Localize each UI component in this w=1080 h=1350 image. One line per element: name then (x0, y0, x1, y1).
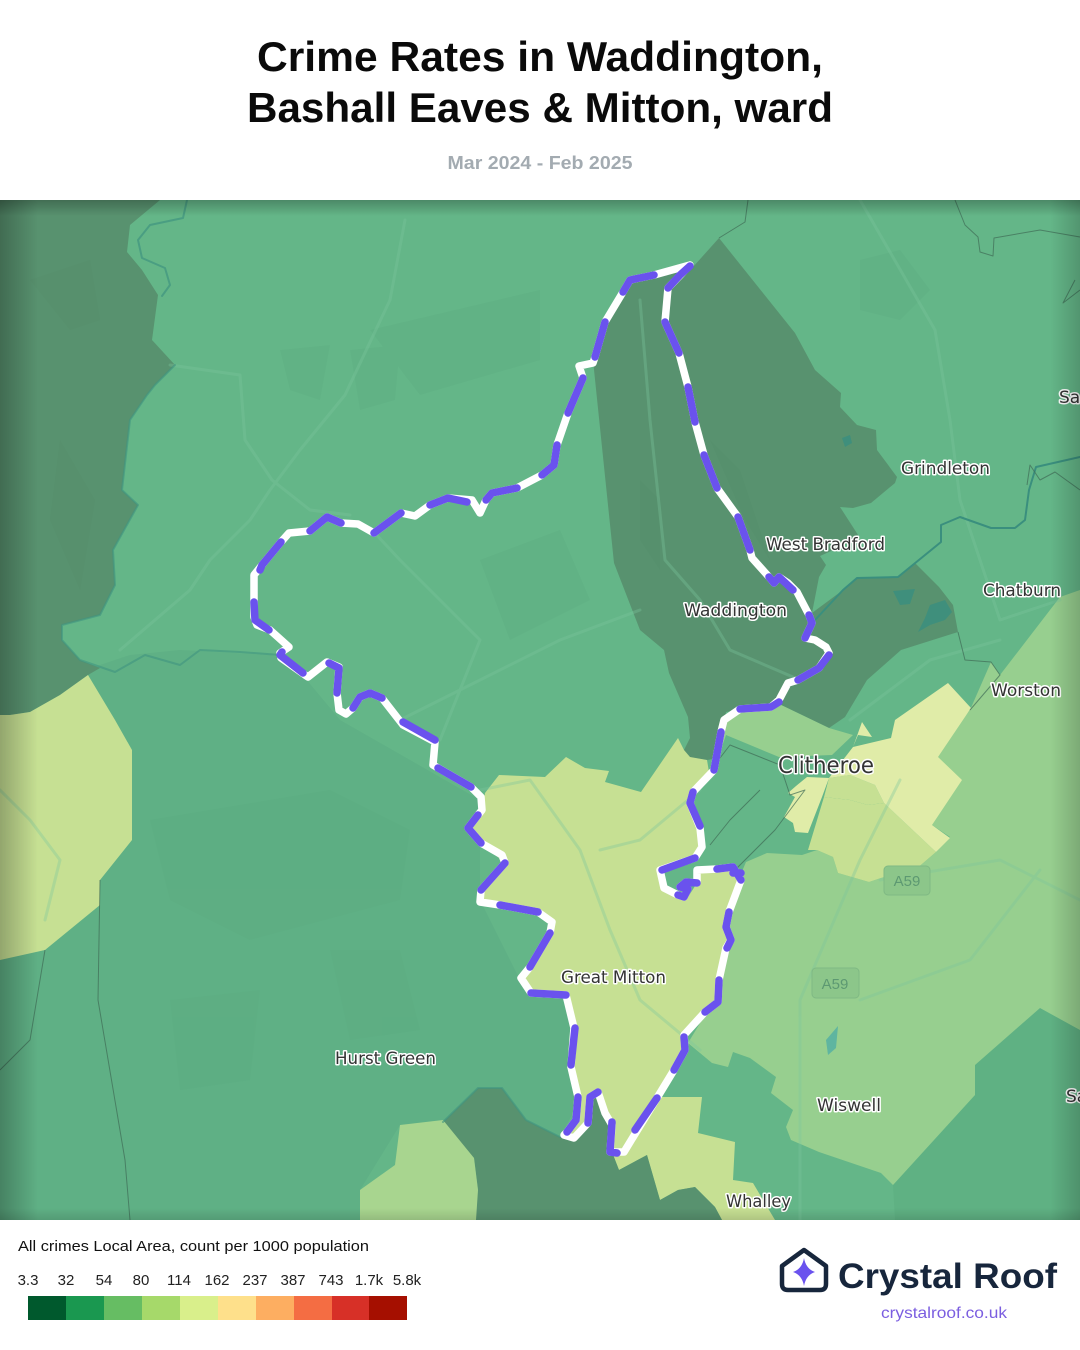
region: dark area south of Great Mitton (443, 1088, 722, 1220)
logo wordmark: Crystal Roof (838, 1257, 1057, 1296)
region: Great Mitton ward light (468, 738, 775, 1220)
region: western light area (0, 675, 132, 960)
place labels: Clitheroe (778, 753, 874, 779)
legend values (18, 1272, 422, 1289)
place labels: Hurst Green (335, 1049, 436, 1069)
place labels: Sa (1059, 388, 1080, 408)
region: south-west lowlands (0, 650, 580, 1220)
region: south-east green (893, 1008, 1080, 1220)
logo: Crystal Roof (782, 1250, 1057, 1322)
legend values: 5.8k (393, 1272, 422, 1289)
place labels: Chatburn (983, 581, 1061, 601)
legend values: 162 (204, 1272, 230, 1289)
legend values: 237 (242, 1272, 268, 1289)
roads (0, 252, 1080, 1144)
place labels: Great Mitton (561, 968, 666, 988)
place labels: West Bradford (766, 535, 885, 555)
title: Bashall Eaves & Mitton, ward (247, 84, 833, 131)
legend title: All crimes Local Area, count per 1000 population (18, 1238, 369, 1255)
date range subtitle: Mar 2024 - Feb 2025 (448, 153, 632, 173)
region: Clitheroe west pale (784, 777, 829, 833)
title (247, 33, 833, 131)
legend colour scale (28, 1296, 407, 1320)
legend values: 114 (167, 1272, 191, 1289)
region: light area south (360, 1120, 478, 1220)
title: Crime Rates in Waddington, (257, 33, 823, 80)
region: western dark area (0, 200, 175, 740)
place labels (335, 388, 1080, 1212)
road shields: A59 (894, 873, 920, 890)
place labels: Worston (991, 681, 1061, 701)
place labels: Waddington (684, 601, 787, 621)
legend values: 743 (318, 1272, 344, 1289)
map edge vignette (0, 200, 1080, 1220)
water bodies (842, 435, 952, 632)
logo url: crystalroof.co.uk (881, 1305, 1008, 1322)
legend values: 32 (58, 1272, 74, 1289)
ward boundary: white base line (254, 265, 829, 1152)
place labels: Whalley (726, 1192, 791, 1212)
icon: house with star (782, 1250, 826, 1290)
legend values: 1.7k (355, 1272, 384, 1289)
road shields: A59 (822, 976, 848, 993)
region: north Clitheroe light green (722, 705, 853, 757)
legend values: 387 (280, 1272, 306, 1289)
ward boundary: purple dashes (254, 266, 829, 1153)
region: Waddington dark area (593, 238, 958, 760)
place labels: Grindleton (901, 459, 990, 479)
region: Clitheroe south light (808, 797, 936, 882)
region: Clitheroe central (824, 775, 884, 805)
legend (18, 1238, 422, 1320)
place labels: Wiswell (817, 1096, 881, 1116)
region: Wiswell and Worston light green (688, 590, 1080, 1185)
road shields (812, 866, 930, 998)
land patches (150, 250, 930, 1090)
legend values: 54 (96, 1272, 112, 1289)
rivers (62, 200, 1080, 1137)
legend values: 3.3 (18, 1272, 38, 1289)
region boundaries (0, 200, 1080, 1220)
choropleth map (0, 200, 1080, 1220)
legend values: 80 (133, 1272, 149, 1289)
region: Clitheroe east pale (829, 683, 971, 852)
